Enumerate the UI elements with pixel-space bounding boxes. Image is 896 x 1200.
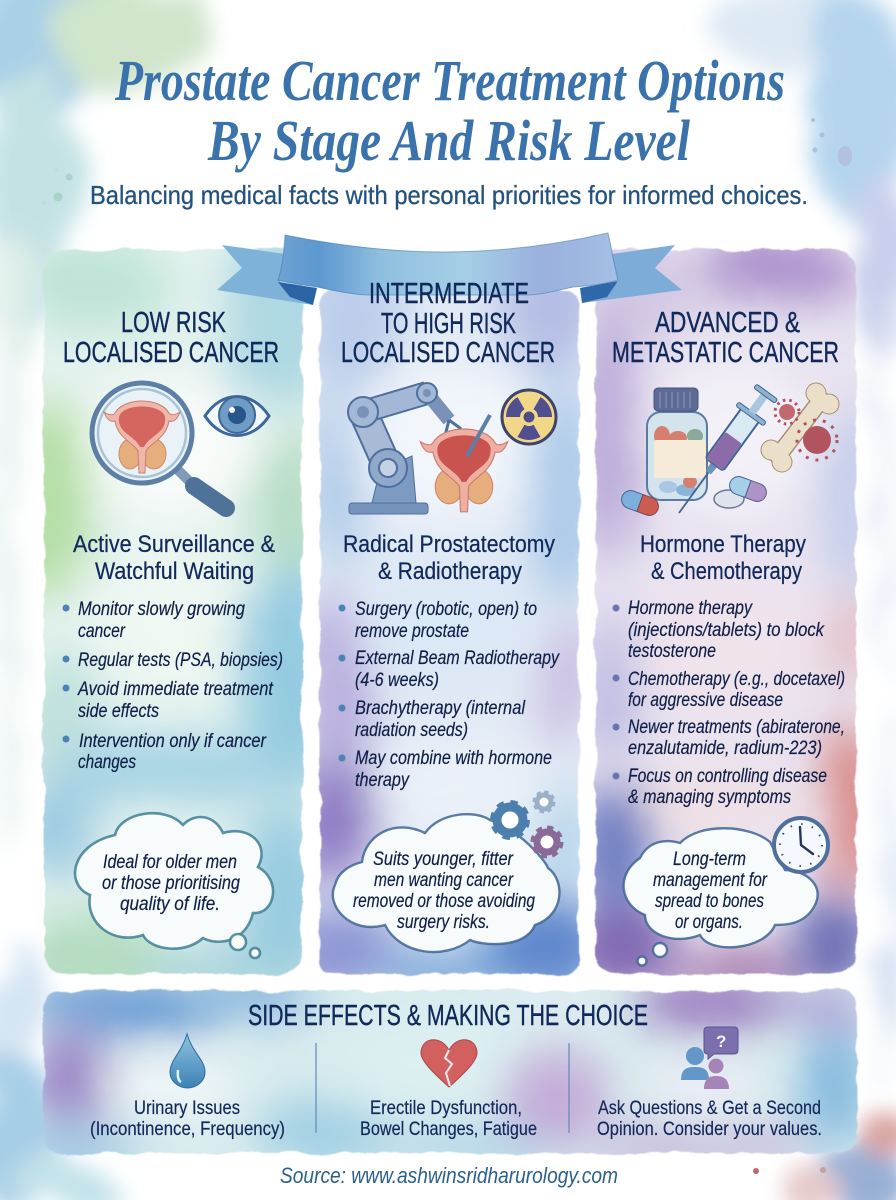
subheading: hormone therapy: & Chemotherapy (651, 558, 802, 585)
text: urinary issues: (Incontinence, Frequency) (90, 1118, 285, 1140)
callout cloud: ideal for: Ideal for older men (103, 851, 237, 873)
subheading: radical prostatectomy (343, 531, 555, 585)
text: urinary issues: Urinary Issues (134, 1097, 240, 1119)
title: By Stage And Risk Level (207, 108, 691, 173)
subheading: radical prostatectomy: Radical Prostatectomy (343, 531, 555, 558)
bullet list: intermediate to high risk: Surgery (robotic, open) to (355, 598, 537, 620)
bullet list: low risk: changes (78, 751, 136, 773)
subtitle: Balancing medical facts with personal priorities for informed choices. (90, 180, 808, 210)
heading: advanced and metastatic (612, 307, 839, 369)
callout cloud: suits younger: men wanting cancer (374, 869, 514, 891)
icon: capsules and tablet (619, 474, 769, 518)
heading: intermediate to high risk: LOCALISED CANCER (341, 337, 555, 369)
panel: side effects and making the choice (42, 988, 859, 1156)
bullet list: low risk: Intervention only if cancer (79, 730, 267, 752)
callout cloud: ideal for: or those prioritising (102, 872, 240, 894)
bullet list: advanced: Chemotherapy (e.g., docetaxel) (628, 668, 845, 690)
ribbon banner (217, 233, 682, 305)
text: ask questions: Opinion. Consider your values. (597, 1118, 822, 1140)
callout cloud: suits younger: surgery risks. (397, 911, 490, 933)
bullet list: advanced: for aggressive disease (628, 689, 783, 711)
heading: side effects: SIDE EFFECTS & MAKING THE CHOICE (248, 1000, 648, 1032)
callout cloud: long-term: management for (653, 869, 768, 891)
title (114, 48, 785, 173)
text: erectile dysfunction (360, 1097, 537, 1140)
subheading: radical prostatectomy: & Radiotherapy (378, 558, 522, 585)
icon: pill bottle (647, 388, 707, 500)
bullet list: intermediate to high risk: External Beam Radiotherapy (355, 647, 560, 669)
bullet list: intermediate to high risk: Brachytherapy (internal (355, 697, 526, 719)
bullet list: advanced: testosterone (628, 640, 716, 662)
bullet list: low risk: Regular tests (PSA, biopsies) (78, 649, 283, 671)
text: urinary issues (90, 1097, 285, 1140)
bullet list: advanced: Focus on controlling disease (628, 765, 827, 787)
heading: low risk: LOW RISK (121, 307, 226, 339)
icon: people asking questions (681, 1027, 738, 1089)
panel: low risk (41, 247, 304, 976)
bullet list: low risk (62, 598, 283, 773)
bullet list: intermediate to high risk: May combine with hormone (355, 747, 552, 769)
icon: magnifying glass over prostate (92, 383, 226, 508)
callout cloud: ideal for (75, 813, 273, 958)
bullet list: low risk: side effects (78, 700, 159, 722)
heading: intermediate to high risk (341, 278, 555, 369)
heading: advanced and metastatic: ADVANCED & (655, 307, 800, 339)
text: erectile dysfunction: Erectile Dysfunction, (370, 1097, 522, 1119)
icon: people asking questions: ? (716, 1032, 726, 1051)
panel: intermediate to high risk (217, 233, 682, 1000)
bullet list: advanced: & managing symptoms (628, 786, 791, 808)
heading: low risk (63, 307, 279, 369)
bullet list: low risk: Avoid immediate treatment (77, 678, 274, 700)
bullet list: intermediate to high risk: remove prostate (355, 620, 469, 642)
bullet list: advanced: enzalutamide, radium-223) (628, 737, 822, 759)
subheading: active surveillance (73, 531, 275, 585)
subheading: active surveillance: Active Surveillance & (73, 531, 275, 558)
callout cloud: ideal for: quality of life. (120, 893, 220, 915)
heading: intermediate to high risk: INTERMEDIATE (369, 278, 529, 310)
icon: water drop (170, 1034, 205, 1088)
subheading: hormone therapy: Hormone Therapy (640, 531, 806, 558)
bullet list: advanced: Newer treatments (abiraterone, (628, 716, 845, 738)
callout cloud: suits younger: Suits younger, fitter (373, 848, 514, 870)
icon: syringe (665, 382, 781, 523)
callout cloud: suits younger: removed or those avoiding (353, 890, 535, 912)
bullet list: low risk: Monitor slowly growing (78, 598, 245, 620)
callout cloud: long-term: or organs. (675, 911, 743, 933)
subheading: active surveillance: Watchful Waiting (95, 558, 254, 585)
icon: radiation symbol (502, 390, 556, 444)
callout cloud: long-term: Long-term (673, 848, 746, 870)
subheading: hormone therapy (640, 531, 806, 585)
bullet list: intermediate to high risk: radiation seeds) (355, 719, 468, 741)
bullet list: advanced (612, 597, 845, 808)
icon: eye (205, 396, 269, 436)
text: ask questions: Ask Questions & Get a Second (598, 1097, 821, 1119)
heading: intermediate to high risk: TO HIGH RISK (381, 308, 516, 340)
text: erectile dysfunction: Bowel Changes, Fatigue (360, 1118, 537, 1140)
bullet list: advanced: Hormone therapy (628, 597, 753, 619)
heading: low risk: LOCALISED CANCER (63, 337, 279, 369)
bullet list: low risk: cancer (78, 620, 126, 642)
icon: robotic surgical arm (348, 383, 460, 514)
panel: advanced and metastatic (592, 247, 858, 976)
icon: gears (493, 792, 561, 856)
icon: broken heart (421, 1040, 477, 1087)
text: ask questions (597, 1097, 822, 1140)
bullet list: intermediate to high risk: therapy (355, 769, 410, 791)
icon: clock (774, 818, 828, 872)
callout cloud: long-term: spread to bones (655, 890, 764, 912)
bullet list: intermediate to high risk: (4-6 weeks) (355, 669, 439, 691)
bullet list: intermediate to high risk (338, 598, 560, 791)
icon: prostate with scalpel (420, 415, 508, 512)
bullet list: advanced: (injections/tablets) to block (628, 619, 825, 641)
source line: Source: www.ashwinsridharurology.com (280, 1163, 618, 1188)
callout cloud: suits younger (333, 814, 559, 952)
icon: bone with cancer cells (761, 383, 839, 472)
callout cloud: long-term (624, 828, 818, 966)
